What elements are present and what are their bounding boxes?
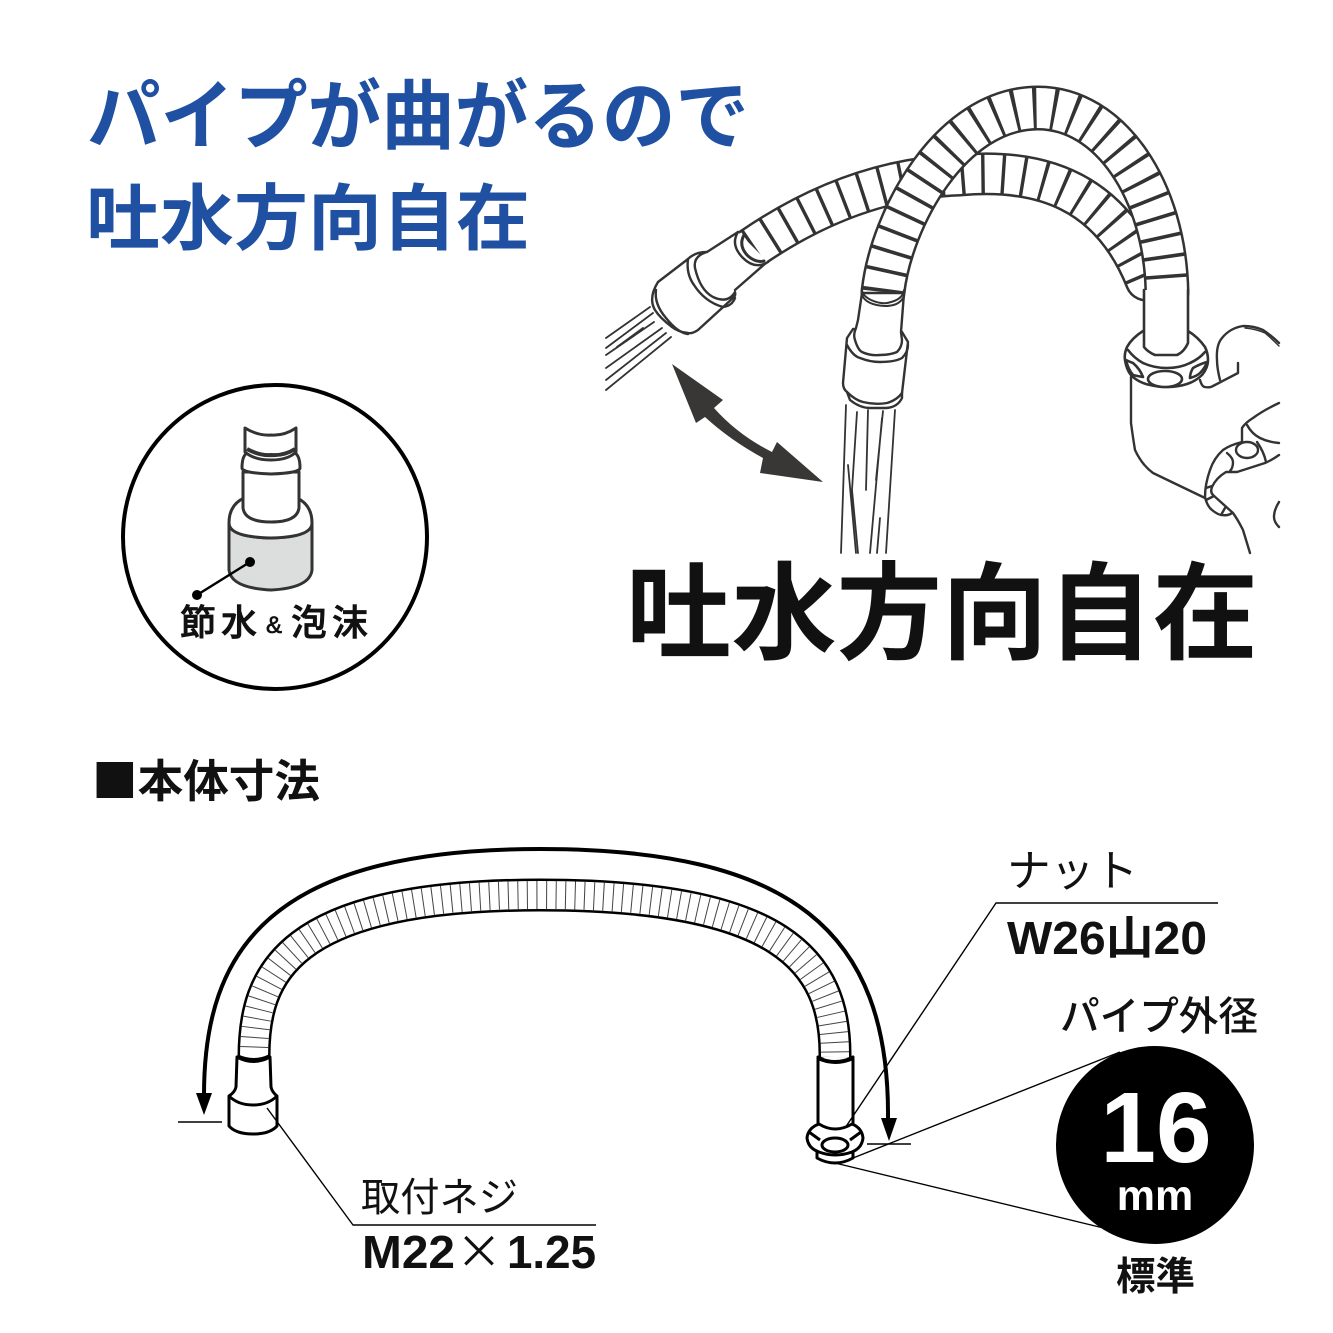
water stream: bent position bbox=[606, 307, 671, 390]
label: nut: ナット bbox=[1007, 847, 1138, 896]
label: mounting thread: 取付ネジ bbox=[361, 1176, 518, 1220]
dimension ticks and leaders bbox=[178, 903, 1218, 1232]
width arrow bbox=[196, 849, 897, 1141]
left fitting bbox=[229, 1056, 277, 1134]
mounting nut bbox=[1125, 290, 1208, 387]
badge: 16 mm: mm bbox=[1117, 1172, 1193, 1220]
panel: aerator detail bbox=[123, 385, 427, 689]
label: mounting thread: M22 bbox=[362, 1226, 455, 1278]
pipe: bent position bbox=[752, 174, 1146, 280]
heading: dimensions: ■本体寸法 bbox=[92, 745, 320, 810]
label: mounting thread: 1.25 bbox=[507, 1226, 596, 1278]
title: blue heading: パイプが曲がるので bbox=[87, 75, 749, 160]
callout text: & bbox=[266, 612, 282, 639]
right fitting bbox=[807, 1057, 863, 1163]
title: blue heading: 吐水方向自在 bbox=[86, 180, 530, 260]
diagram: body dimensions bbox=[178, 849, 1218, 1232]
faucet body bbox=[1131, 326, 1279, 553]
badge: 16 mm: 16 bbox=[1100, 1072, 1212, 1184]
nozzle: straight position bbox=[843, 288, 908, 408]
icon: aerator bbox=[229, 428, 312, 590]
label: pipe diameter: パイプ外径 bbox=[1060, 995, 1258, 1039]
pipe: straight position bbox=[883, 108, 1167, 292]
nozzle: bent position bbox=[652, 232, 768, 334]
arrow: swing direction bbox=[672, 364, 823, 482]
label: standard: 標準 bbox=[1116, 1256, 1195, 1299]
label: mounting thread bbox=[361, 1176, 596, 1282]
corrugated pipe bbox=[254, 895, 835, 1057]
callout pointer bbox=[192, 557, 255, 600]
circle outline bbox=[123, 385, 427, 689]
label: mounting thread: × bbox=[456, 1216, 502, 1282]
label: nut bbox=[1007, 847, 1207, 964]
label: nut: W26山20 bbox=[1007, 912, 1207, 964]
title: blue heading bbox=[86, 75, 749, 260]
illustration: bendable faucet pipe bbox=[606, 108, 1279, 553]
callout text: 泡沫 bbox=[291, 602, 368, 643]
large label: 吐水方向自在 bbox=[626, 556, 1258, 674]
water stream: straight position bbox=[841, 405, 895, 553]
badge: 16 mm bbox=[1056, 1046, 1254, 1244]
callout text: 節水 bbox=[180, 602, 257, 643]
